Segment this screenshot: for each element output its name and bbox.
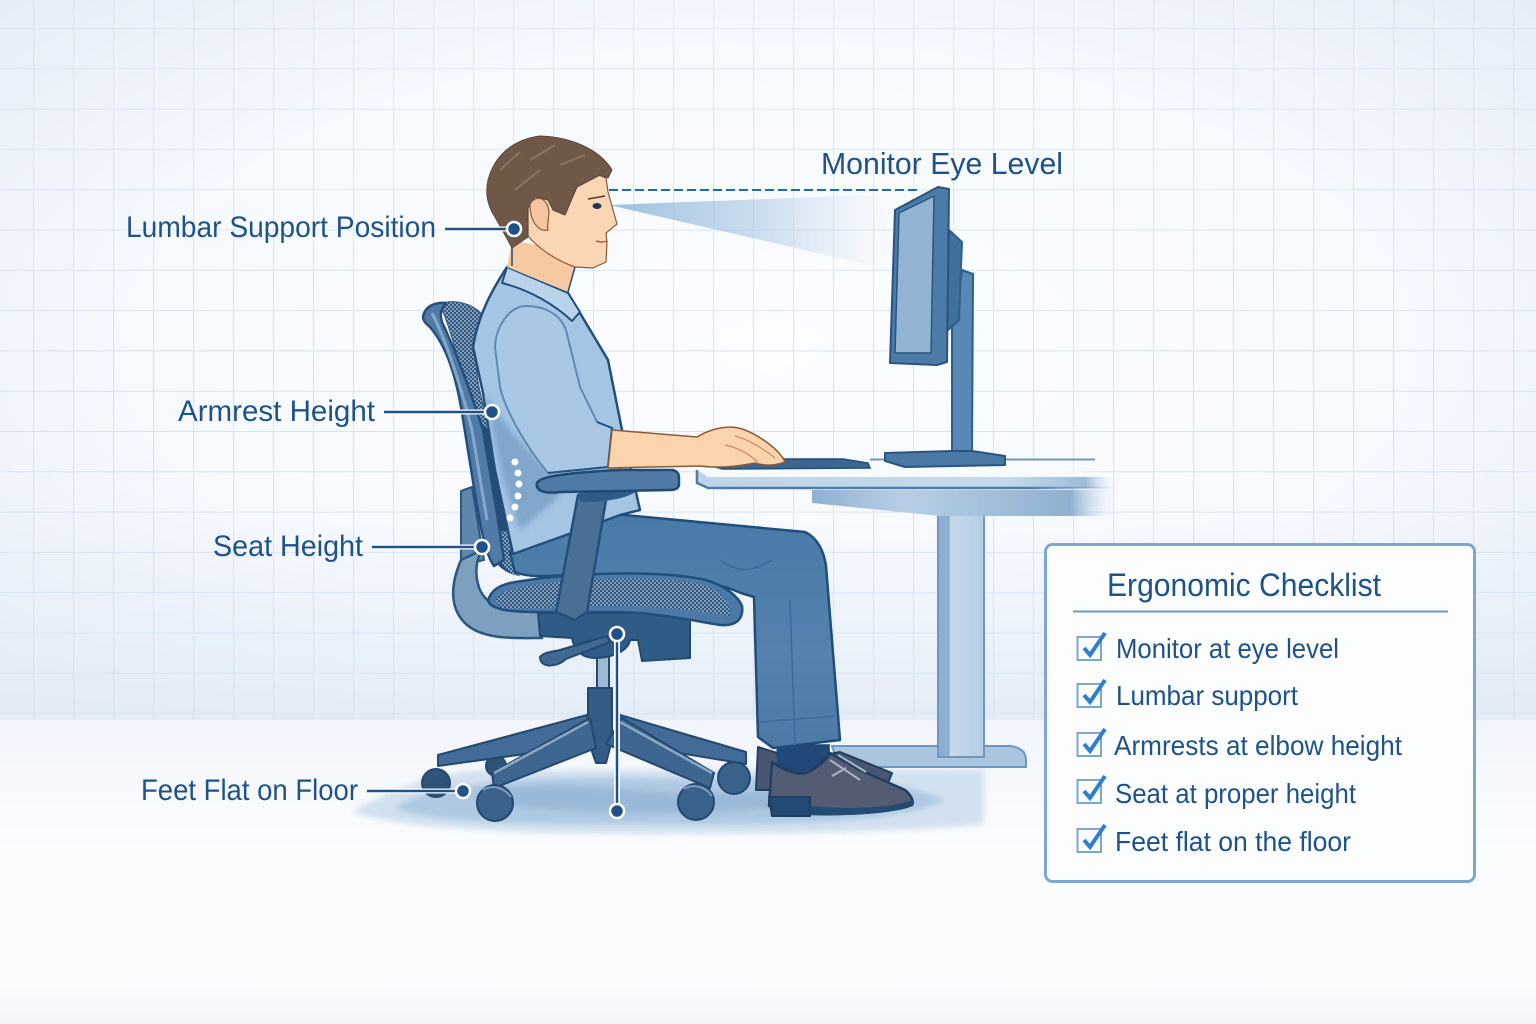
sleeve cuff outline	[548, 422, 612, 473]
eye	[592, 203, 602, 209]
rear casters	[422, 756, 750, 797]
monitor	[885, 187, 1005, 467]
eye brow	[588, 196, 605, 199]
label: seat height: Seat Height	[213, 530, 364, 563]
head	[487, 136, 617, 268]
monitor body	[890, 187, 949, 365]
callout: feet	[367, 784, 470, 798]
hair strands	[500, 145, 585, 190]
frame highlight	[432, 313, 487, 520]
neck lines	[512, 246, 575, 292]
item: armrests at elbow height: Armrests at elbow height	[1114, 730, 1402, 761]
callout: lumbar support	[445, 222, 521, 236]
back shoe	[756, 747, 892, 790]
label: armrest height: Armrest Height	[178, 395, 376, 428]
front casters	[477, 784, 714, 821]
seat mechanism	[538, 613, 690, 661]
forearm and hand	[608, 427, 785, 468]
neck	[507, 240, 575, 292]
chair seat	[488, 574, 742, 625]
face	[528, 160, 617, 268]
title rule	[1073, 610, 1448, 612]
mouth	[596, 241, 607, 242]
label: lumbar support position: Lumbar Support Position	[126, 211, 436, 244]
seat lever	[540, 636, 610, 666]
armrest pad	[537, 470, 679, 493]
desk front edge	[697, 470, 1115, 488]
lower mesh	[492, 530, 520, 576]
item: lumbar support: Lumbar support	[1116, 680, 1298, 711]
eye level dashed line	[609, 189, 918, 191]
callout: armrest	[384, 405, 499, 419]
shirt torso	[473, 267, 640, 554]
background wall	[0, 0, 1536, 722]
front shoe	[769, 753, 913, 816]
ear	[530, 198, 549, 230]
backrest frame	[423, 303, 504, 566]
column	[588, 688, 612, 763]
desk	[697, 460, 1116, 767]
desk edge lines	[697, 470, 1115, 488]
rear legs	[438, 715, 746, 766]
dark lumbar pad	[478, 420, 520, 576]
upper arm sleeve	[495, 306, 612, 473]
panel: ergonomic checklist	[1046, 544, 1474, 882]
back support curve	[453, 550, 542, 638]
checklist title: Ergonomic Checklist	[1107, 567, 1381, 603]
sight cone	[609, 194, 895, 271]
item: monitor at eye level: Monitor at eye level	[1116, 633, 1339, 664]
lower back panel	[461, 487, 484, 565]
keyboard	[715, 459, 870, 469]
mesh backrest	[440, 302, 495, 450]
label: monitor eye level: Monitor Eye Level	[821, 146, 1063, 181]
chair back part	[423, 302, 542, 638]
armrest post	[556, 495, 606, 620]
shirt collar	[502, 267, 580, 321]
front legs	[492, 718, 714, 788]
panel box	[1046, 544, 1474, 882]
label: feet flat on floor: Feet Flat on Floor	[141, 774, 358, 807]
floor shadow	[352, 770, 984, 834]
armrest	[537, 470, 679, 620]
monitor rear housing	[947, 230, 962, 331]
desk surface	[697, 462, 1115, 476]
chair base	[422, 613, 750, 821]
front leg highlights	[494, 722, 712, 773]
item: seat at proper height: Seat at proper height	[1115, 778, 1356, 809]
torso shading	[485, 393, 575, 530]
desk underside	[812, 490, 1116, 516]
floor	[0, 720, 1536, 1024]
callout: seat	[372, 540, 489, 554]
trousers	[510, 513, 840, 748]
lumbar dots	[506, 458, 522, 522]
monitor base	[885, 451, 1005, 467]
wall lower tint	[0, 0, 1536, 722]
item: feet flat on the floor: Feet flat on the floor	[1115, 826, 1351, 857]
background grid	[0, 0, 1536, 720]
hair	[487, 136, 612, 248]
sock	[777, 745, 829, 774]
seat height vertical marker	[610, 627, 624, 818]
monitor stand	[952, 270, 973, 453]
finger lines	[725, 436, 775, 462]
gas cylinder	[597, 655, 609, 691]
desk back line	[870, 458, 1095, 460]
monitor screen	[895, 196, 934, 353]
desk leg and foot	[832, 515, 1026, 767]
armrest cup	[578, 489, 640, 502]
